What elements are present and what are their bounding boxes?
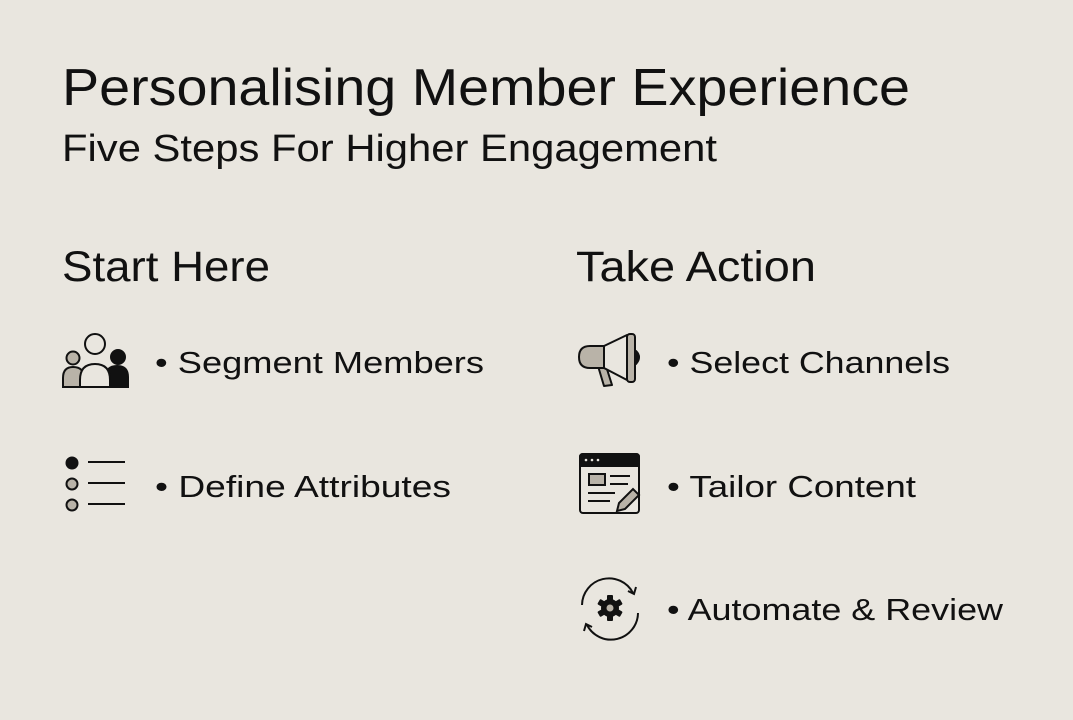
icon: members group bbox=[63, 334, 128, 387]
item: segment members: • Segment Members bbox=[155, 345, 484, 380]
icon: megaphone bbox=[579, 334, 639, 386]
icon: content window bbox=[580, 454, 639, 513]
item: automate & review: • Automate & Review bbox=[667, 592, 1004, 627]
heading: start here: Start Here bbox=[62, 243, 270, 291]
item: define attributes: • Define Attributes bbox=[155, 469, 451, 504]
subtitle: Five Steps For Higher Engagement bbox=[62, 128, 717, 170]
title: Personalising Member Experience bbox=[62, 59, 910, 117]
item: tailor content: • Tailor Content bbox=[667, 469, 916, 504]
icon: automate gear cycle bbox=[582, 578, 638, 640]
heading: take action: Take Action bbox=[576, 243, 816, 291]
icon: list bbox=[66, 458, 125, 510]
item: select channels: • Select Channels bbox=[667, 345, 950, 380]
